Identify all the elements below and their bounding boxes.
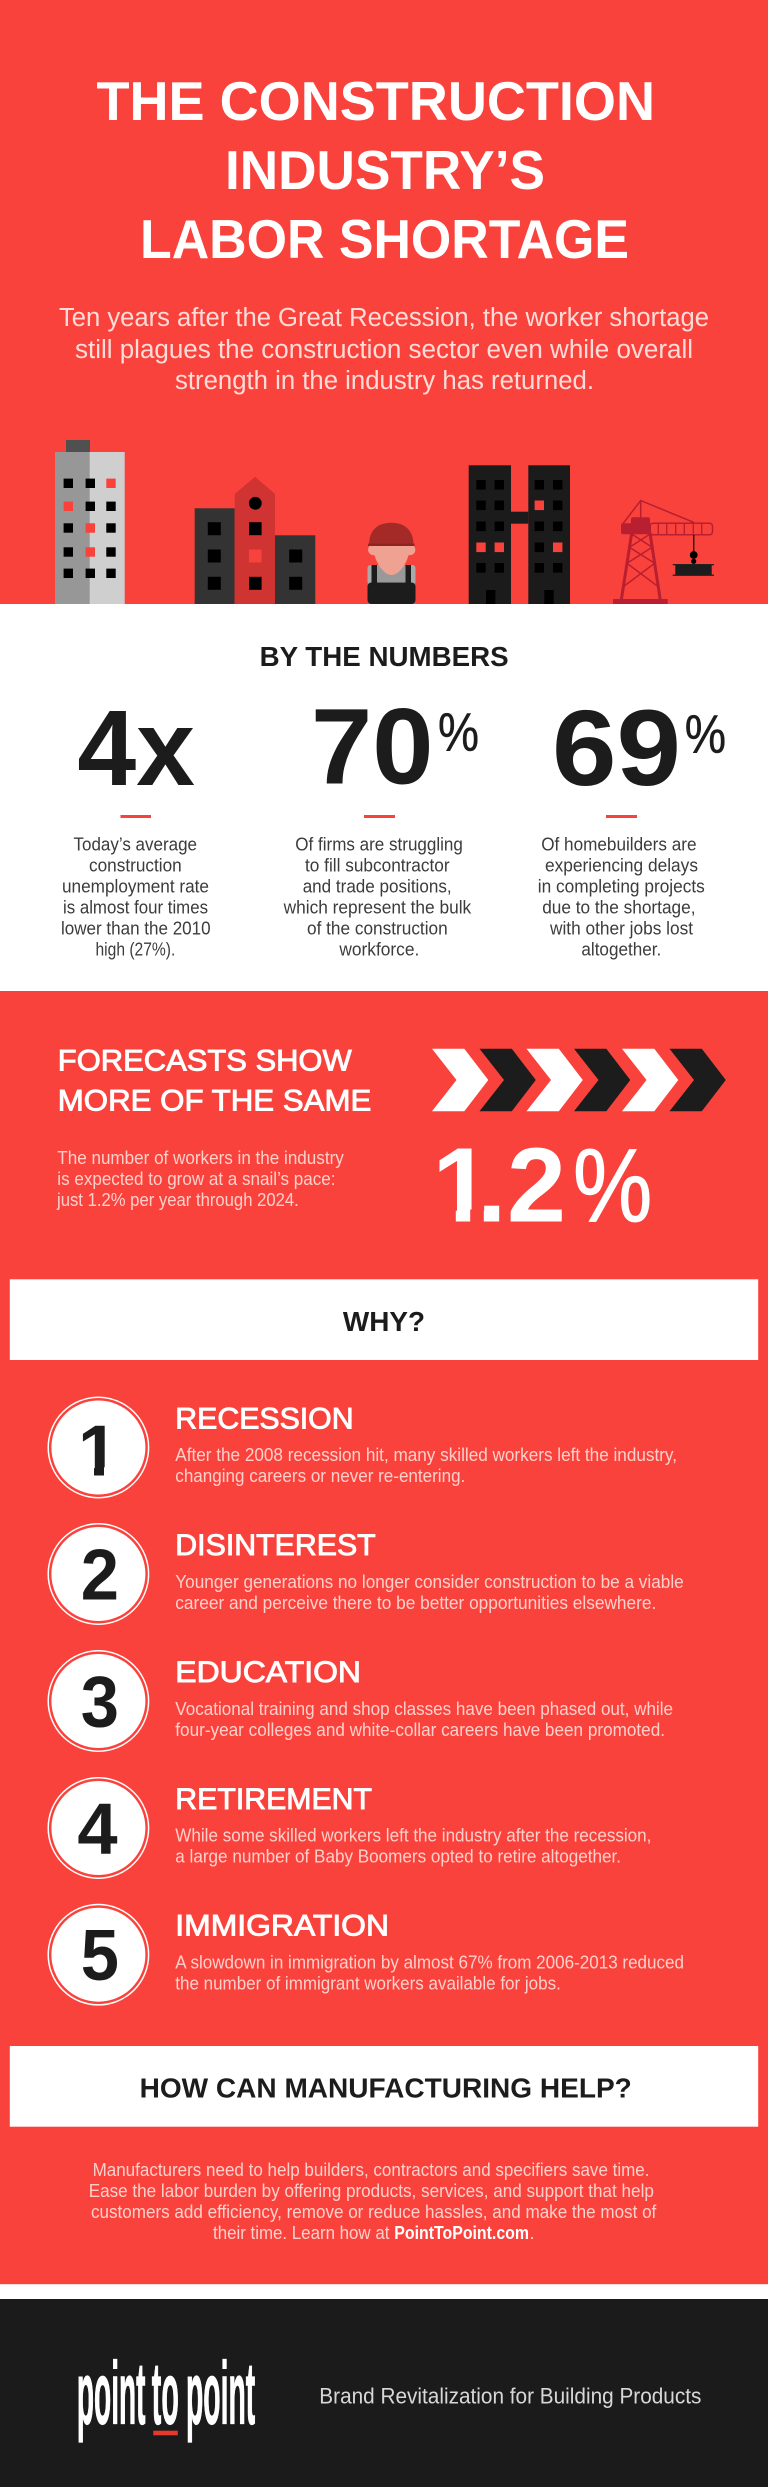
reason 1: recession: [48, 1397, 677, 1498]
icon: black twin tower building: [469, 465, 570, 604]
icon: red and dark buildings: [195, 477, 315, 604]
icon: number 1 badge: [48, 1397, 149, 1498]
text: stat 1 description: [61, 834, 211, 960]
intro text: strength in the industry has returned.: [175, 367, 594, 395]
icon: number 2 badge: 2: [81, 1535, 119, 1615]
text: stat 2 description: which represent the bulk: [283, 896, 472, 918]
title: [96, 70, 655, 270]
reason 3: education: [48, 1651, 673, 1751]
text: manufacturing help paragraph: their time. Learn how at: [213, 2222, 389, 2243]
panel: white divider: [0, 2284, 768, 2299]
text: manufacturing help paragraph: PointToPoint.com: [394, 2222, 529, 2243]
text: retirement description: a large number of Baby Boomers opted to retire altogether.: [175, 1846, 621, 1867]
text: immigration description: A slowdown in immigration by almost 67% from 2006-2013 reduced: [175, 1951, 684, 1972]
tagline: Brand Revitalization for Building Products: [319, 2383, 701, 2408]
intro text: Ten years after the Great Recession, the worker shortage: [59, 304, 709, 332]
text: retirement description: [175, 1825, 651, 1867]
stat: 4x: 4x: [77, 687, 195, 808]
logo: point to point: point: [77, 2343, 146, 2442]
stat: 70 percent: %: [438, 703, 479, 763]
text: stat 3 description: experiencing delays: [545, 855, 698, 876]
text: recession description: changing careers or never re-entering.: [175, 1465, 465, 1486]
text: stat 2 description: Of firms are struggling: [295, 834, 463, 855]
text: stat 3 description: altogether.: [581, 939, 661, 960]
icon: tower crane: [613, 500, 714, 604]
text: education description: Vocational training and shop classes have been phased out, while: [175, 1698, 673, 1719]
text: stat 2 description: to fill subcontractor: [305, 855, 450, 876]
text: stat 1 description: lower than the 2010: [61, 918, 211, 939]
icon: number 5 badge: 5: [81, 1916, 119, 1996]
text: stat 3 description: due to the shortage,: [542, 896, 696, 918]
text: stat 2 description: of the construction: [307, 918, 448, 939]
text: manufacturing help paragraph: Manufacturers need to help builders, contractors and specifiers save time.: [93, 2159, 650, 2180]
text: stat 1 description: unemployment rate: [62, 876, 209, 897]
icon: number 2 badge: [48, 1524, 149, 1624]
text: disinterest description: [175, 1571, 684, 1613]
text: recession description: [175, 1444, 677, 1486]
title: INDUSTRY’S: [225, 139, 545, 201]
icon: number 3 badge: 3: [81, 1663, 119, 1743]
banner: why: WHY?: [343, 1306, 425, 1337]
panel: hero background: [0, 0, 768, 604]
stat: 70 percent: 70: [311, 685, 434, 806]
icon: chevron arrows: [432, 1049, 726, 1111]
text: education description: four-year colleges and white-collar careers have been promoted.: [175, 1719, 665, 1740]
stat: 69 percent: %: [685, 705, 726, 765]
text: stat 3 description: [538, 834, 705, 960]
icon: number 5 badge: [48, 1904, 149, 2005]
icon: number 4 badge: 4: [77, 1789, 118, 1869]
reason 2: disinterest: [48, 1524, 684, 1624]
panel: footer: point: [186, 2343, 255, 2442]
text: forecast description: [56, 1147, 344, 1210]
text: stat 3 description: in completing projects: [538, 876, 705, 897]
text: stat 2 description: and trade positions,: [303, 876, 452, 897]
icon: number 1 badge: 1: [78, 1412, 118, 1492]
text: stat 2 description: workforce.: [338, 939, 419, 960]
heading: by the numbers: BY THE NUMBERS: [260, 641, 509, 672]
dash accents: [120, 815, 637, 818]
text: manufacturing help paragraph: Ease the labor burden by offering products, services, and support that help: [89, 2180, 654, 2201]
banner: how can manufacturing help: [10, 2046, 758, 2127]
panel: by the numbers: [0, 604, 768, 991]
text: disinterest description: Younger generations no longer consider construction to be a viable: [175, 1571, 684, 1592]
panel: red lower background: [0, 991, 768, 2284]
heading: recession: RECESSION: [175, 1403, 354, 1436]
stat: 1.2 percent: [431, 1127, 652, 1245]
stat: 69 percent: 69: [552, 687, 681, 808]
heading: education: EDUCATION: [175, 1656, 361, 1689]
icon: gray tower building: [55, 440, 125, 604]
text: forecast description: is expected to grow at a snail’s pace:: [57, 1168, 336, 1189]
title: THE CONSTRUCTION: [96, 70, 655, 132]
reason 4: retirement: [48, 1778, 651, 1878]
text: retirement description: While some skilled workers left the industry after the recession,: [175, 1825, 651, 1846]
text: stat 1 description: construction: [89, 855, 182, 876]
text: immigration description: the number of immigrant workers available for jobs.: [175, 1972, 561, 1993]
text: stat 1 description: high (27%).: [96, 939, 175, 960]
text: manufacturing help paragraph: [89, 2159, 657, 2243]
banner: how can manufacturing help: HOW CAN MANUFACTURING HELP?: [140, 2073, 632, 2104]
banner: why: [10, 1279, 758, 1360]
heading: forecasts: [58, 1045, 371, 1118]
logo: point to point: to: [152, 2343, 179, 2442]
text: forecast description: just 1.2% per year through 2024.: [56, 1189, 299, 1210]
icon: number 3 badge: [48, 1651, 149, 1751]
text: stat 1 description: is almost four times: [63, 896, 208, 918]
heading: immigration: IMMIGRATION: [175, 1909, 389, 1942]
icon: number 4 badge: [48, 1778, 149, 1878]
text: disinterest description: career and perceive there to be better opportunities elsewhere.: [175, 1592, 656, 1613]
intro text: [59, 304, 709, 395]
text: stat 1 description: Today’s average: [74, 834, 197, 855]
panel: footer: [0, 2299, 768, 2487]
intro text: still plagues the construction sector even while overall: [75, 336, 693, 364]
text: stat 3 description: Of homebuilders are: [541, 834, 696, 855]
text: manufacturing help paragraph: .: [530, 2222, 535, 2243]
heading: disinterest: DISINTEREST: [175, 1529, 376, 1562]
stat: 1.2 percent: 1.2: [432, 1127, 566, 1245]
heading: forecasts: FORECASTS SHOW: [58, 1045, 352, 1078]
reason 5: immigration: [48, 1904, 684, 2005]
text: education description: [175, 1698, 673, 1740]
text: recession description: After the 2008 recession hit, many skilled workers left the industry,: [175, 1444, 677, 1465]
text: stat 3 description: with other jobs lost: [549, 918, 693, 939]
title: LABOR SHORTAGE: [140, 208, 629, 270]
icon: construction worker: [368, 523, 416, 604]
stat: 69 percent: [552, 687, 726, 808]
heading: forecasts: MORE OF THE SAME: [58, 1085, 371, 1118]
text: manufacturing help paragraph: customers add efficiency, remove or reduce hassles, and make the most of: [91, 2201, 657, 2222]
heading: retirement: RETIREMENT: [175, 1783, 372, 1816]
text: forecast description: The number of workers in the industry: [57, 1147, 344, 1168]
text: stat 2 description: [283, 834, 472, 960]
stat: 1.2 percent: %: [573, 1129, 652, 1245]
text: immigration description: [175, 1951, 684, 1993]
